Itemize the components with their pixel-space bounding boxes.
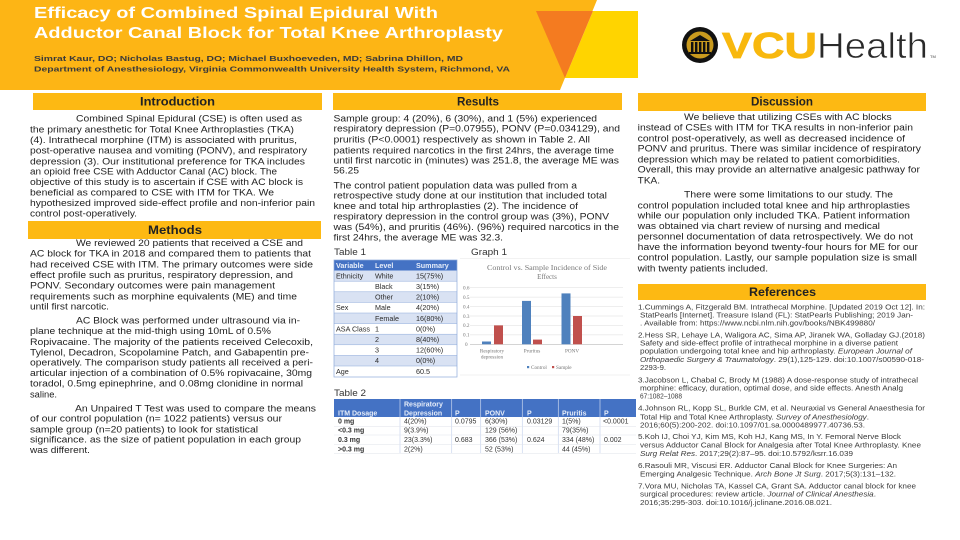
panel: results	[332, 93, 622, 244]
table 2: outcomes by ITM dosage: 4(20%)	[404, 418, 427, 426]
table 1: demographics: Age	[336, 367, 349, 376]
panel: results: The control patient population data was pulled from a	[334, 180, 578, 191]
panel: introduction: control post-operatively.	[30, 209, 137, 220]
table 2: outcomes by ITM dosage: P	[604, 411, 609, 418]
table 2: outcomes by ITM dosage: P	[455, 411, 460, 418]
table 1: demographics: 3(15%)	[416, 282, 439, 291]
table 1: demographics: 0(0%)	[416, 324, 435, 333]
table 1: demographics: 15(75%)	[416, 271, 443, 280]
panel: methods: An Unpaired T Test was used to compare the means	[75, 403, 316, 414]
panel: references: StatPearls [Internet]. Treasure Island (FL): StatPearls Publishing; 2019 Jan-	[640, 310, 913, 319]
graph 1: bar chart: 0.1	[463, 333, 470, 339]
table 1: demographics: 60.5	[416, 367, 430, 376]
panel: discussion	[637, 93, 926, 274]
table 1: demographics: 16(80%)	[416, 314, 443, 323]
panel: discussion: was obtained via chart review of nursing and medical	[637, 221, 880, 232]
panel: introduction: depression (3). Our institutional preference for TKA includes	[30, 156, 305, 167]
table 2: outcomes by ITM dosage: 0.03129	[527, 418, 552, 426]
panel: introduction: hypothesized improved side-effect profile and non-inferior pain	[30, 198, 315, 209]
panel: methods: Methods	[148, 225, 202, 237]
legend	[527, 365, 572, 371]
panel: discussion: Overall, this may provide an alternative analgesic pathway for	[638, 165, 921, 176]
table 2: outcomes by ITM dosage: Depression	[404, 411, 442, 418]
panel: discussion: with twenty patients included.	[637, 263, 768, 274]
panel: introduction	[30, 93, 322, 220]
icon: VCU seal	[682, 27, 718, 63]
panel: references: 7.Vora MU, Nicholas TA, Kassel CA, Grant SA. Adductor canal block for knee	[638, 481, 916, 490]
panel: introduction: (4). Intrathecal morphine (ITM) is associated with pruritus,	[30, 135, 297, 146]
panel: methods: We reviewed 20 patients that received a CSE and	[76, 238, 303, 249]
panel: references: 2016;35:295-303. doi:10.1016/j.jclinane.2016.08.021.	[640, 498, 832, 507]
title: Adductor Canal Block for Total Knee Arthroplasty	[34, 25, 503, 42]
authors and affiliation: Simrat Kaur, DO; Nicholas Bastug, DO; Michael Buxhoeveden, MD; Sabrina Dhillon, MD	[34, 54, 464, 63]
table 1: demographics: Summary	[416, 261, 449, 270]
panel: methods: plane technique at the mid-thigh using 10mL of 0.5%	[30, 326, 271, 337]
graph 1: bar chart: 0.6	[463, 286, 470, 292]
table 1: demographics	[334, 260, 457, 377]
table 2: outcomes by ITM dosage: >0.3 mg	[338, 446, 364, 453]
panel: references: . Available from: https://www.ncbi.nlm.nih.gov/books/NBK499880/	[640, 318, 876, 327]
panel: methods: effect profile such as pruritus, respiratory depression, and	[30, 270, 293, 281]
panel: introduction: Combined Spinal Epidural (CSE) is often used as	[76, 113, 302, 124]
table 1: demographics: Black	[375, 282, 393, 291]
table 2: outcomes by ITM dosage: <0.3 mg	[338, 428, 364, 435]
table 2: outcomes by ITM dosage: PONV	[485, 411, 505, 418]
panel: introduction: post-operative nausea and vomiting (PONV), and respiratory	[30, 146, 307, 157]
panel: references: References	[749, 287, 816, 299]
graph 1 label: Graph 1	[471, 247, 507, 258]
panel: results: 56.25	[334, 166, 359, 177]
panel: methods: until first narcotic.	[30, 302, 109, 313]
panel: introduction: an opioid free CSE with Adductor Canal (AC) block. The	[30, 167, 277, 178]
panel: discussion: while our population only included TKA. Patient information	[637, 211, 910, 222]
panel: introduction: Introduction	[140, 96, 215, 108]
panel: references: 6.Rasouli MR, Viscusi ER. Adductor Canal Block for Knee Surgeries: An	[638, 461, 897, 470]
table 2: outcomes by ITM dosage: <0.0001	[603, 418, 629, 426]
panel: references: surgical procedures: review article. Journal of Clinical Anesthesia .	[640, 489, 876, 498]
table 2: outcomes by ITM dosage: 129 (56%)	[485, 428, 517, 435]
panel: references: morphine: efficacy, duration, optimal dose, and side effects. Anesth Analg	[640, 384, 903, 393]
panel: results: first 24hrs, the average ME was 32.3.	[334, 233, 503, 244]
table 1: demographics: 3	[375, 346, 379, 355]
logo: VCU Health: VCU	[722, 25, 817, 66]
table 2: outcomes by ITM dosage: Respiratory	[404, 402, 443, 409]
panel: methods: toradol, 0.5mg epinephrine, and 0.08mg clonidine in normal	[30, 379, 303, 390]
panel: references: 2293-9.	[640, 363, 666, 372]
legend: Control	[531, 365, 547, 371]
panel: methods: AC block for TKA in 2018 and compared them to patients that	[30, 249, 311, 260]
panel: results: pruritis (P<0.0001) respectively as shown in Table 2. All	[334, 134, 590, 145]
table 1: demographics: Male	[375, 303, 391, 312]
panel: methods: was different.	[29, 445, 90, 456]
panel: introduction: the primary anesthetic for Total Knee Arthroplasties (TKA)	[30, 124, 294, 135]
table 1: demographics: ASA Class	[336, 324, 370, 333]
panel: results: respiratory depression in the control group was (3%), PONV	[334, 212, 610, 223]
panel: discussion: TKA.	[638, 175, 660, 186]
table 1: demographics: 2(10%)	[416, 293, 439, 302]
panel: methods: AC Block was performed under ultrasound via in-	[76, 316, 300, 327]
chart title: Effects	[537, 273, 557, 281]
graph 1: bar chart: PONV	[565, 348, 579, 354]
table 2: outcomes by ITM dosage: 6(30%)	[485, 418, 508, 426]
table 2: outcomes by ITM dosage: 334 (48%)	[562, 437, 594, 444]
table 2: outcomes by ITM dosage: 9(3.9%)	[404, 428, 429, 435]
table 1: demographics: 12(60%)	[416, 346, 443, 355]
table 1: demographics: Level	[375, 261, 393, 270]
graph 1: bar chart: 0.3	[463, 314, 470, 320]
panel: references: 67:1082–1088	[640, 392, 682, 401]
panel: discussion: depression which may be related to patient comorbidities.	[638, 154, 900, 165]
table 2: outcomes by ITM dosage: 0.0795	[455, 418, 477, 426]
panel: methods: significance. as the size of patient population in each group	[30, 435, 301, 446]
panel: methods: had received CSE with ITM. The primary outcomes were side	[30, 259, 313, 270]
table 2: outcomes by ITM dosage: 366 (53%)	[485, 437, 517, 444]
table 2: outcomes by ITM dosage: 2(2%)	[404, 446, 423, 453]
panel: methods: requirements such as morphine equivalents (ME) and time	[30, 291, 297, 302]
panel: discussion: have the information beyond twenty-four hours for ME for our	[638, 242, 919, 253]
panel: discussion: control population included total knee and hip arthroplasties	[638, 200, 910, 211]
panel: methods: sample group (n=20 patients) to look for statistical	[30, 424, 258, 435]
table 2: outcomes by ITM dosage: 79(35%)	[562, 428, 588, 435]
panel: introduction: objective of this study is to ascertain if CSE with AC block is	[30, 177, 303, 188]
panel: discussion: We believe that utilizing CSEs with AC blocks	[684, 112, 892, 123]
graph 1: bar chart: 0	[465, 342, 468, 348]
legend: Sample	[556, 365, 572, 371]
panel: references: 2016;60(5):200-202. doi:10.1097/01.sa.0000489977.40736.53.	[640, 420, 865, 429]
table 1: demographics: 0(0%)	[416, 356, 435, 365]
panel: methods: PONV. Secondary outcomes were pain management	[30, 280, 275, 291]
panel: results: retrospective study done at our institution that included total	[334, 190, 607, 201]
graph 1: bar chart	[460, 258, 630, 375]
panel: discussion: control population. Lastly, our sample population size is small	[638, 253, 917, 264]
table 2: outcomes by ITM dosage: 52 (53%)	[485, 446, 513, 453]
title: Efficacy of Combined Spinal Epidural With	[34, 5, 438, 22]
table 2: outcomes by ITM dosage: 0.002	[604, 437, 622, 444]
table 2: outcomes by ITM dosage: 0 mg	[338, 418, 354, 426]
panel: methods: saline.	[30, 389, 57, 400]
authors and affiliation	[34, 54, 511, 73]
panel: discussion: instead of CSEs with ITM for TKA results in non-inferior pain	[638, 123, 913, 134]
panel: discussion: personnel documentation of data retrospectively. We do not	[638, 231, 913, 242]
bars: control	[482, 293, 570, 344]
panel: references: versus Adductor Canal Block for Analgesia after Total Knee Arthroplasty. Knee	[640, 440, 921, 449]
panel: methods: Tylenol, Decadron, Scopolamine Patch, and Gabapentin pre-	[30, 347, 309, 358]
panel: discussion: control post-operatively, as well as decreased incidence of	[638, 133, 905, 144]
graph 1: bar chart: Respiratory	[480, 348, 505, 354]
panel: results: Sample group: 4 (20%), 6 (30%), and 1 (5%) experienced	[334, 113, 597, 124]
panel: references: 1.Cummings A, Fitzgerald BM. Intrathecal Morphine. [Updated 2019 Oct 12]. In:	[638, 302, 925, 311]
authors and affiliation: Department of Anesthesiology, Virginia Commonwealth University Health System, Richmond, VA	[34, 64, 511, 73]
table 1: demographics: 1	[375, 324, 379, 333]
table 1: demographics: Other	[375, 293, 394, 302]
panel: results: respiratory depression (P=0.07955), PONV (P=0.034129), and	[334, 124, 620, 135]
table 1: demographics: Ethnicity	[336, 271, 364, 280]
panel: references: 2.Hess SR, Lehaye LA, Waligora AC, Sima AP, Jiranek WA, Golladay GJ.(2018)	[638, 331, 925, 340]
table 1: demographics: 4	[375, 356, 379, 365]
table 2: outcomes by ITM dosage: 44 (45%)	[562, 446, 590, 453]
table 2: outcomes by ITM dosage: 23(3.3%)	[404, 437, 432, 444]
panel: references: Total Hip and Total Knee Arthroplasty. Survey of Anesthesiology .	[640, 412, 869, 421]
header banner	[0, 0, 638, 90]
table 1: demographics: White	[375, 271, 393, 280]
panel: results: patients required narcotics in the first 24hrs, the average time	[334, 145, 614, 156]
table 2: outcomes by ITM dosage: 0.624	[527, 437, 545, 444]
panel: methods: articular injection of a combination of 0.5% ropivacaine, 30mg	[30, 368, 312, 379]
chart title: Control vs. Sample Incidence of Side	[487, 264, 607, 272]
panel: references: Surg Relat Res . 2017;29(2):87–95. doi:10.5792/ksrr.16.039	[640, 449, 853, 458]
panel: introduction: beneficial as compared to CSE with ITM for TKA. We	[30, 187, 274, 198]
table 2: outcomes by ITM dosage: Pruritis	[562, 411, 587, 418]
panel: discussion: Discussion	[751, 96, 813, 108]
panel: methods: operatively. The comparison study patients all received a peri-	[30, 358, 313, 369]
table 2: outcomes by ITM dosage: P	[527, 411, 532, 418]
panel: references: 3.Jacobson L, Chabal C, Brody M (1988) A dose-response study of intrathecal	[638, 376, 918, 385]
graph 1: bar chart: 0.5	[463, 295, 470, 301]
table 1: demographics: Sex	[336, 303, 349, 312]
panel: references: 4.Johnson RL, Kopp SL, Burkle CM, et al. Neuraxial vs General Anaesthesia for	[638, 404, 925, 413]
table 2: outcomes by ITM dosage	[334, 399, 636, 453]
logo: VCU Health: TM	[930, 54, 936, 59]
graph 1: bar chart: depression	[481, 354, 503, 360]
table 1: demographics: 8(40%)	[416, 335, 439, 344]
panel: methods: of our control population (n= 1022 patients) versus our	[30, 414, 283, 425]
panel: methods: Ropivacaine. The majority of the patients received Celecoxib,	[30, 337, 313, 348]
panel: references: Emerging Analgesic Technique. Arch Bone Jt Surg . 2017;5(3):131–132.	[640, 469, 896, 478]
graph 1: bar chart: Pruritus	[524, 348, 540, 354]
panel: discussion: There were some limitations to our study. The	[684, 190, 893, 201]
title	[34, 5, 503, 42]
panel: references	[638, 284, 926, 507]
panel: references: population undergoing total knee and hip arthroplasty. European Journal of	[640, 347, 913, 356]
panel: results: Results	[457, 97, 499, 109]
logo: VCU Health	[682, 25, 936, 66]
table 2: outcomes by ITM dosage: 1(5%)	[562, 418, 581, 426]
table 2: outcomes by ITM dosage: 0.3 mg	[338, 437, 360, 444]
table 2 label: Table 2	[334, 388, 366, 399]
table 1: demographics: 4(20%)	[416, 303, 439, 312]
graph 1: bar chart: 0.4	[463, 304, 470, 310]
graph 1: bar chart: 0.2	[463, 323, 470, 329]
table 2: outcomes by ITM dosage: 0.683	[455, 437, 473, 444]
panel: results: knee and total hip arthroplasties (2). The incidence of	[334, 201, 578, 212]
panel: references: Orthopaedic Surgery & Traumatology . 29(1),125-129. doi:10.1007/s00590-018-	[640, 355, 924, 364]
panel: results: was (54%), and pruritis (46%). (96%) required narcotics in the	[332, 222, 619, 233]
panel: references: 5.Koh IJ, Choi YJ, Kim MS, Koh HJ, Kang MS, In Y. Femoral Nerve Block	[638, 432, 901, 441]
logo: VCU Health: Health	[817, 25, 928, 66]
panel: results: until first narcotic in (minutes) was 251.8, the average ME was	[334, 156, 619, 167]
chart title	[487, 264, 607, 281]
table 1: demographics: 2	[375, 335, 379, 344]
panel: references: Safety and side-effect profile of intrathecal morphine in a diverse patient	[640, 339, 899, 348]
panel: methods	[28, 221, 321, 456]
table 1 label: Table 1	[334, 247, 366, 258]
table 1: demographics: Female	[375, 314, 399, 323]
bars: sample	[494, 316, 582, 344]
table 1: demographics: Variable	[336, 261, 364, 270]
table 2: outcomes by ITM dosage: ITM Dosage	[338, 411, 377, 418]
panel: discussion: PONV and pruritus. There was similar incidence of respiratory	[638, 144, 921, 155]
